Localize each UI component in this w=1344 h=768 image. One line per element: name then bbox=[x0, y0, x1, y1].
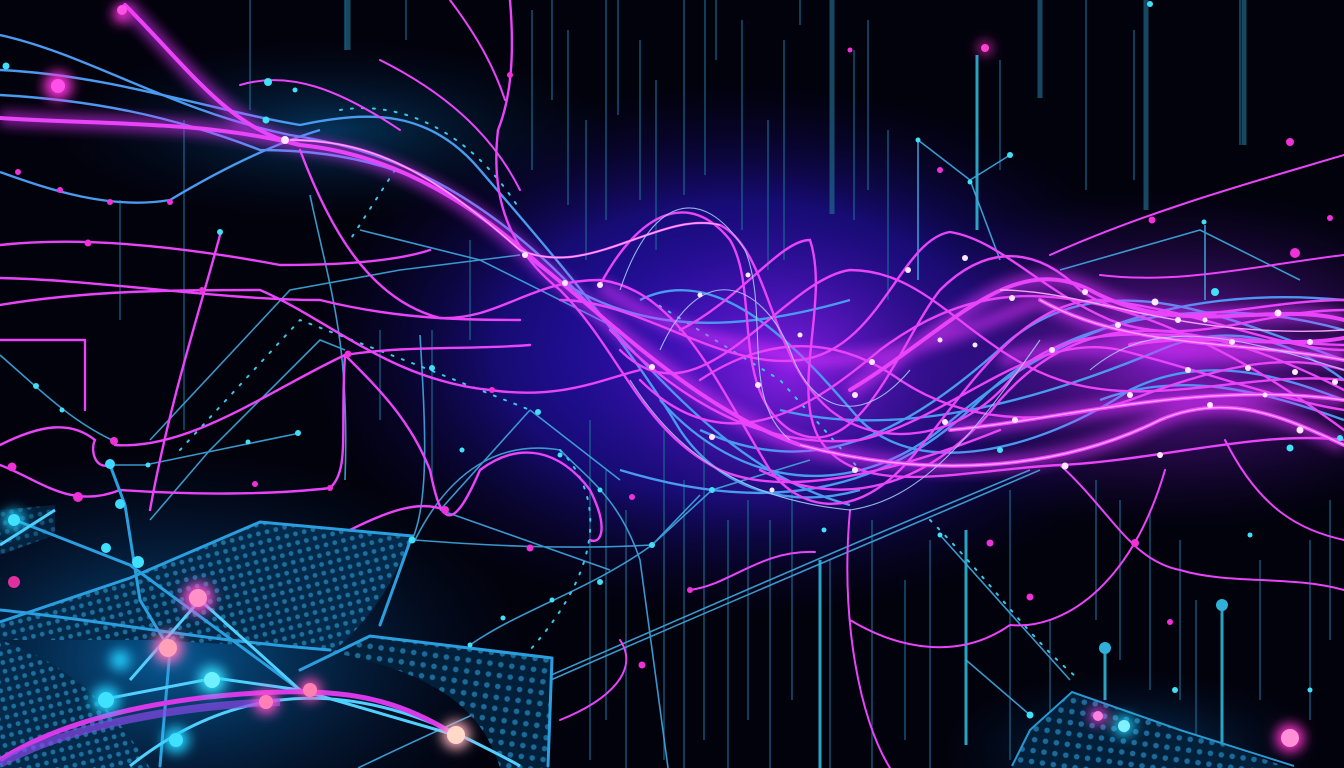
white bright nodes on the strand bundle bbox=[281, 136, 1338, 492]
blue strand bundle, top left to centre bbox=[0, 35, 1344, 505]
magenta small nodes bbox=[8, 48, 1333, 668]
mesh: bottom left bbox=[0, 465, 552, 768]
thin cyan network web, lower centre bbox=[0, 140, 1300, 768]
magenta strand halo bbox=[0, 5, 1344, 466]
bright core highlights bbox=[290, 140, 1344, 466]
dashed cyan traces bbox=[180, 108, 1080, 680]
mesh: bottom right bbox=[1012, 692, 1294, 768]
white-blue fine strands bbox=[620, 208, 1344, 510]
